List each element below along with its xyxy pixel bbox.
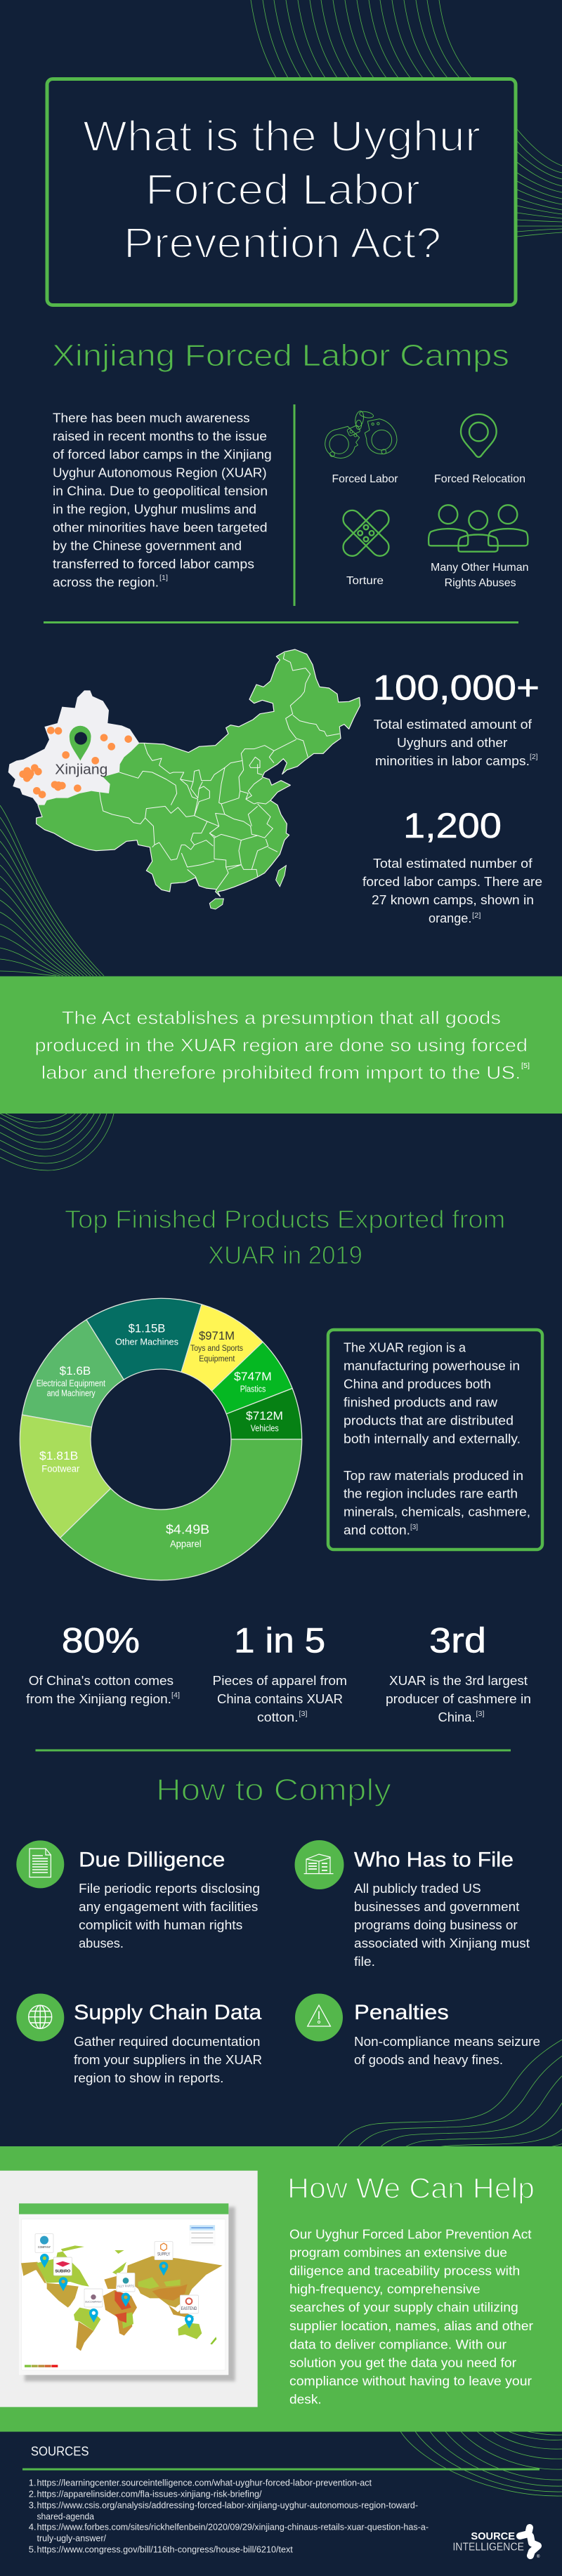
text box: XUAR manufacturing powerhouse: the region includes rare earth — [344, 1487, 518, 1501]
donut labels: Electrical Equipment — [37, 1379, 105, 1389]
slice: Vehicles — [226, 1388, 302, 1439]
heading: How to Comply: How to Comply — [156, 1773, 391, 1807]
sources list: https://www.forbes.com/sites/rickhelfenbein/2020/09/29/xinjiang-chinaus-retails-xuar-question-has-a- — [37, 2522, 429, 2532]
slice: Other Machines — [86, 1298, 202, 1380]
heading: Top Finished Products — [65, 1205, 505, 1269]
donut labels: $747M — [234, 1370, 272, 1383]
icon: people, Many Other Human Rights Abuses: Many Other Human — [431, 562, 528, 574]
sources list: 3. — [29, 2500, 37, 2511]
intro paragraph: [1] — [159, 574, 168, 582]
item: Due Dilligence — [16, 1840, 260, 1950]
text: program description: diligence and traceability process with — [289, 2264, 520, 2278]
slice: Footwear — [20, 1415, 111, 1538]
title box: Prevention Act? — [124, 219, 441, 267]
intro paragraph: transferred to forced labor camps — [53, 557, 254, 571]
intro paragraph: Uyghur Autonomous Region (XUAR) — [53, 466, 267, 480]
intro paragraph: raised in recent months to the issue — [53, 430, 267, 444]
item: Penalties: Non-compliance means seizure — [354, 2035, 540, 2049]
text: program description: high-frequency, comprehensive — [289, 2283, 481, 2297]
text box: XUAR manufacturing powerhouse: both internally and externally. — [344, 1432, 521, 1446]
heading: SOURCES: SOURCES — [31, 2445, 89, 2459]
sources list: 5. — [29, 2544, 37, 2555]
donut labels: Other Machines — [115, 1336, 178, 1347]
location pins — [40, 2254, 194, 2329]
donut labels: Apparel — [170, 1538, 202, 1549]
text: program description: compliance without having to leave your — [289, 2374, 532, 2388]
text: program description: desk. — [289, 2392, 322, 2406]
item: Due Dilligence: File periodic reports disclosing — [79, 1882, 260, 1896]
sources list: 2. — [29, 2489, 37, 2499]
icon: handcuffs, Forced Labor — [325, 411, 398, 485]
stat: 1,200: Total estimated number of — [373, 857, 533, 871]
stat: 1,200: 1,200 — [403, 806, 502, 845]
item: Who Has to File: All publicly traded US — [354, 1882, 481, 1896]
sources list: shared-agenda — [37, 2511, 95, 2522]
logo: Source Intelligence: SOURCE — [471, 2530, 515, 2542]
item: Penalties — [295, 1994, 540, 2067]
item: Who Has to File: associated with Xinjiang must — [354, 1936, 530, 1950]
icon: warning triangle — [295, 1994, 343, 2042]
stat: 1,200: orange. — [429, 911, 471, 925]
stat: 80% — [26, 1621, 180, 1706]
icon: bandage, Torture — [339, 507, 393, 587]
text box: XUAR manufacturing powerhouse: [3] — [410, 1524, 418, 1531]
item: Who Has to File: businesses and government — [354, 1900, 519, 1914]
intro paragraph: There has been much awareness — [53, 411, 250, 425]
text: program description: searches of your supply chain utilizing — [289, 2301, 518, 2315]
stat: 100,000+: [2] — [530, 753, 538, 761]
panel: How We Can Help band — [0, 2146, 562, 2432]
map: China provinces — [37, 649, 360, 909]
stat: 1 in 5: cotton. — [257, 1710, 298, 1724]
stat: 1,200: forced labor camps. There are — [362, 875, 542, 889]
donut labels — [37, 1322, 283, 1549]
map of China with Xinjiang highlighted — [8, 649, 360, 909]
stat: 3rd: [3] — [476, 1710, 485, 1718]
item: Who Has to File: file. — [354, 1955, 375, 1969]
stat: 1 in 5 — [212, 1621, 347, 1724]
stat: 3rd: China. — [438, 1710, 475, 1724]
supplier cards — [35, 2234, 198, 2313]
screenshot: supplier map dashboard: SUCOMPANY — [85, 2300, 102, 2303]
donut labels: Toys and Sports — [190, 1345, 243, 1353]
item: Due Dilligence: any engagement with facilities — [79, 1900, 258, 1914]
icon: handcuffs, Forced Labor: Forced Labor — [332, 473, 398, 485]
map: orange camp markers — [19, 727, 132, 798]
map label: Xinjiang: Xinjiang — [55, 762, 107, 778]
intro paragraph: in China. Due to geopolitical tension — [53, 484, 268, 498]
donut labels: $712M — [246, 1410, 283, 1422]
logo: Source Intelligence — [452, 2528, 540, 2559]
icon: buildings — [295, 1840, 344, 1889]
slice: Electrical Equipment and Machinery — [22, 1320, 124, 1427]
stat: 80%: Of China's cotton comes — [29, 1674, 174, 1688]
screenshot: supplier map dashboard: COMPANY — [38, 2245, 51, 2249]
text box: XUAR manufacturing powerhouse: finished products and raw — [344, 1396, 498, 1410]
donut chart — [20, 1298, 302, 1580]
intro paragraph: across the region. — [53, 575, 159, 589]
item: Who Has to File — [295, 1840, 530, 1969]
logo: Source Intelligence: INTELLIGENCE — [452, 2541, 524, 2553]
icon: pin, Forced Relocation — [434, 414, 525, 485]
text box: XUAR manufacturing powerhouse — [328, 1330, 542, 1550]
text: program description: supplier location, names, alias and other — [289, 2319, 533, 2333]
icon: pin, Forced Relocation: Forced Relocation — [434, 473, 525, 485]
item: Supply Chain Data — [16, 1994, 262, 2085]
sources list: 4. — [29, 2522, 37, 2532]
text box: XUAR manufacturing powerhouse: minerals, chemicals, cashmere, — [344, 1505, 530, 1519]
slice: Plastics — [211, 1342, 292, 1414]
stat: 3rd: producer of cashmere in — [386, 1692, 531, 1706]
sources list: 1. — [29, 2478, 37, 2488]
stat: 80%: 80% — [62, 1621, 140, 1660]
item: Supply Chain Data: region to show in reports. — [74, 2071, 223, 2085]
text box: XUAR manufacturing powerhouse: and cotton. — [344, 1524, 410, 1538]
heading: Top Finished Products: Top Finished Products Exported from — [65, 1205, 505, 1234]
item: Who Has to File: programs doing business or — [354, 1918, 518, 1932]
intro paragraph: by the Chinese government and — [53, 539, 242, 553]
stat: 80%: from the Xinjiang region. — [26, 1692, 171, 1706]
donut labels: Footwear — [41, 1464, 80, 1474]
item: Due Dilligence: complicit with human rights — [79, 1918, 242, 1932]
sources list: truly-ugly-answer/ — [37, 2533, 106, 2544]
text: program description: solution you get the data you need for — [289, 2356, 516, 2370]
intro paragraph — [53, 411, 272, 589]
callout band: the Act — [0, 976, 562, 1114]
map side legend — [190, 2225, 215, 2245]
stat: 100,000+: 100,000+ — [373, 668, 540, 707]
item: Penalties: of goods and heavy fines. — [354, 2053, 503, 2067]
sources list: https://learningcenter.sourceintelligence.com/what-uyghur-forced-labor-prevention-act — [37, 2478, 372, 2488]
screenshot: supplier map dashboard: EASTEND — [181, 2306, 197, 2311]
slice: Apparel — [60, 1439, 302, 1580]
item: Due Dilligence: abuses. — [79, 1936, 124, 1950]
icon: bandage, Torture: Torture — [346, 575, 384, 587]
item: Due Dilligence: Due Dilligence — [79, 1849, 225, 1872]
heading: Xinjiang Forced Labor Camps: Xinjiang Forced Labor Camps — [52, 338, 509, 373]
stat: 1 in 5: 1 in 5 — [234, 1621, 325, 1660]
donut labels: $1.15B — [129, 1322, 165, 1335]
icon: people, Many Other Human Rights Abuses — [429, 505, 528, 589]
item: Supply Chain Data: Supply Chain Data — [74, 2001, 262, 2024]
map: Xinjiang region — [8, 690, 139, 805]
stat: 100,000+: Total estimated amount of — [374, 718, 532, 732]
stat: 3rd: XUAR is the 3rd largest — [389, 1674, 528, 1688]
item: Who Has to File: Who Has to File — [354, 1849, 514, 1872]
stat: 1,200 — [362, 806, 542, 925]
title box: What is the Uyghur — [83, 112, 481, 160]
donut labels: and Machinery — [47, 1389, 96, 1399]
donut labels: $4.49B — [166, 1521, 209, 1536]
screenshot: supplier map dashboard: ALLY PARTS — [117, 2285, 134, 2288]
icon: globe — [16, 1994, 64, 2042]
logo: Source Intelligence: ® — [537, 2554, 540, 2559]
text: program description: Our Uyghur Forced Labor Prevention Act — [289, 2228, 532, 2242]
sources list: https://www.congress.gov/bill/116th-congress/house-bill/6210/text — [37, 2544, 293, 2555]
callout band: the Act: [5] — [521, 1062, 530, 1070]
stat: 3rd — [386, 1621, 531, 1724]
stat: 100,000+: Uyghurs and other — [397, 736, 507, 750]
item: Supply Chain Data: from your suppliers in the XUAR — [74, 2053, 262, 2067]
donut labels: $1.6B — [60, 1365, 91, 1378]
text box: XUAR manufacturing powerhouse: China and produces both — [344, 1378, 491, 1392]
text box: XUAR manufacturing powerhouse: manufacturing powerhouse in — [344, 1359, 520, 1373]
intro paragraph: in the region, Uyghur muslims and — [53, 502, 256, 516]
donut labels: $971M — [199, 1330, 235, 1342]
text: program description: program combines an extensive due — [289, 2246, 507, 2260]
stat: 1 in 5: China contains XUAR — [217, 1692, 343, 1706]
risk colour scale — [25, 2365, 58, 2367]
intro paragraph: other minorities have been targeted — [53, 521, 268, 535]
text box: XUAR manufacturing powerhouse: The XUAR region is a — [344, 1340, 466, 1354]
donut labels: $1.81B — [39, 1450, 78, 1462]
callout band: the Act: labor and therefore prohibited from import to the US. — [41, 1062, 521, 1083]
screenshot: supplier map dashboard — [0, 2171, 258, 2407]
donut labels: Vehicles — [251, 1424, 279, 1434]
text box: XUAR manufacturing powerhouse: products that are distributed — [344, 1413, 514, 1427]
card logos — [40, 2236, 192, 2304]
icon: document — [16, 1840, 64, 1888]
callout band: the Act: produced in the XUAR region are done so using forced — [35, 1035, 528, 1056]
text: program description — [289, 2228, 533, 2406]
stat: 1,200: [2] — [472, 912, 481, 920]
text: program description: data to deliver compliance. With our — [289, 2337, 507, 2351]
title box: Forced Labor — [145, 166, 420, 213]
text box: XUAR manufacturing powerhouse: Top raw materials produced in — [344, 1469, 523, 1483]
stat: 3rd: 3rd — [429, 1621, 486, 1660]
callout band: the Act: The Act establishes a presumption that all goods — [62, 1008, 501, 1029]
stat: 100,000+ — [373, 668, 540, 768]
stat: 1 in 5: Pieces of apparel from — [212, 1674, 347, 1688]
stat: 80%: [4] — [171, 1692, 180, 1699]
donut labels: Plastics — [240, 1385, 266, 1394]
world map regions — [21, 2245, 223, 2351]
map: Xinjiang pin — [70, 726, 91, 760]
sources list: https://apparelinsider.com/fla-issues-xinjiang-risk-briefing/ — [37, 2489, 262, 2499]
screenshot: supplier map dashboard: SUBIRO — [55, 2270, 70, 2274]
sources list: https://www.csis.org/analysis/addressing-forced-labor-xinjiang-uyghur-autonomous-region-toward- — [37, 2500, 418, 2511]
heading: Top Finished Products: XUAR in 2019 — [208, 1241, 362, 1269]
heading: How We Can Help: How We Can Help — [287, 2172, 535, 2205]
title box — [47, 79, 516, 305]
item: Penalties: Penalties — [354, 2001, 449, 2024]
sources list — [29, 2478, 429, 2555]
screenshot: supplier map dashboard: SUPPLY — [157, 2253, 170, 2257]
slice: Toys and Sports Equipment — [181, 1304, 263, 1391]
icon: people, Many Other Human Rights Abuses: Rights Abuses — [445, 577, 516, 589]
donut labels: Equipment — [199, 1355, 235, 1363]
stat: 1 in 5: [3] — [299, 1710, 308, 1718]
stat: 1,200: 27 known camps, shown in — [372, 893, 534, 907]
item: Supply Chain Data: Gather required documentation — [74, 2035, 260, 2049]
intro paragraph: of forced labor camps in the Xinjiang — [53, 448, 272, 462]
stat: 100,000+: minorities in labor camps. — [375, 754, 530, 768]
